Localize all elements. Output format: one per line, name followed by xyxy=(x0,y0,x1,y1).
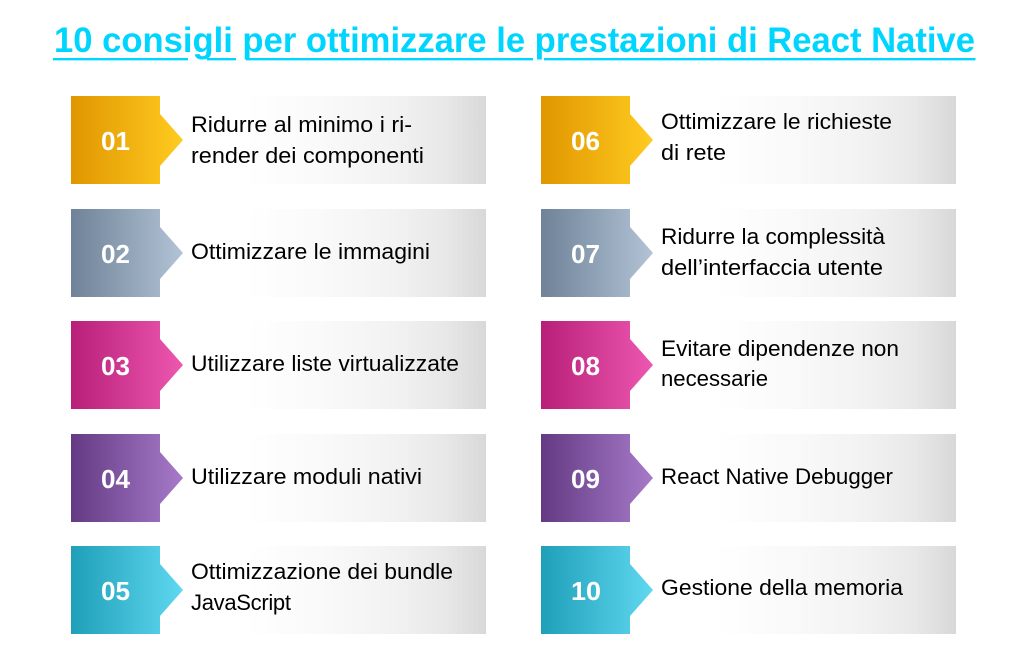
panel: tip 08 xyxy=(541,321,956,409)
number badge 08 xyxy=(541,321,653,409)
number badge 02 xyxy=(71,209,183,297)
panel: tip 03 xyxy=(71,321,486,409)
number badge 09: 09 xyxy=(571,464,600,494)
panel: tip 01 xyxy=(71,96,486,184)
number badge 01 xyxy=(71,96,183,184)
number badge 06 xyxy=(541,96,653,184)
panel: tip 10 xyxy=(541,546,956,634)
text: tip 01 xyxy=(191,112,424,168)
text: tip 01: Ridurre al minimo i ri- xyxy=(191,112,412,137)
text: tip 04: Utilizzare moduli nativi xyxy=(191,464,422,489)
text: tip 06: di rete xyxy=(661,140,726,165)
text: tip 09: React Native Debugger xyxy=(661,464,893,489)
number badge 01: 01 xyxy=(101,126,130,156)
text: tip 05: Ottimizzazione dei bundle xyxy=(191,559,453,584)
panel: tip 07 xyxy=(541,209,956,297)
text: tip 06 xyxy=(661,109,892,165)
text: tip 01: render dei componenti xyxy=(191,143,424,168)
number badge 10: 10 xyxy=(571,576,601,606)
text: tip 06: Ottimizzare le richieste xyxy=(661,109,892,134)
panel: tip 06 xyxy=(541,96,956,184)
number badge 03: 03 xyxy=(101,351,130,381)
panel: tip 09 xyxy=(541,434,956,522)
number badge 04 xyxy=(71,434,183,522)
panel: tip 05 xyxy=(71,546,486,634)
number badge 09 xyxy=(541,434,653,522)
text: tip 05 xyxy=(191,559,453,615)
text: tip 03: Utilizzare liste virtualizzate xyxy=(191,351,459,376)
text: tip 08: Evitare dipendenze non xyxy=(661,336,899,361)
title: 10 consigli per ottimizzare le prestazioni di React Native xyxy=(54,21,975,60)
text: tip 05: JavaScript xyxy=(191,590,291,615)
text: tip 02: Ottimizzare le immagini xyxy=(191,239,430,264)
number badge 06: 06 xyxy=(571,126,600,156)
panel: tip 02 xyxy=(71,209,486,297)
number badge 05: 05 xyxy=(101,576,130,606)
number badge 05 xyxy=(71,546,183,634)
number badge 02: 02 xyxy=(101,239,130,269)
text: tip 07: dell’interfaccia utente xyxy=(661,255,883,280)
number badge 04: 04 xyxy=(101,464,131,494)
text: tip 08 xyxy=(661,336,899,391)
number badge 07: 07 xyxy=(571,239,600,269)
number badge 10 xyxy=(541,546,653,634)
text: tip 07 xyxy=(661,224,886,280)
text: tip 10: Gestione della memoria xyxy=(661,575,904,600)
text: tip 08: necessarie xyxy=(661,366,768,391)
number badge 08: 08 xyxy=(571,351,600,381)
number badge 07 xyxy=(541,209,653,297)
panel: tip 04 xyxy=(71,434,486,522)
number badge 03 xyxy=(71,321,183,409)
text: tip 07: Ridurre la complessità xyxy=(661,224,886,249)
